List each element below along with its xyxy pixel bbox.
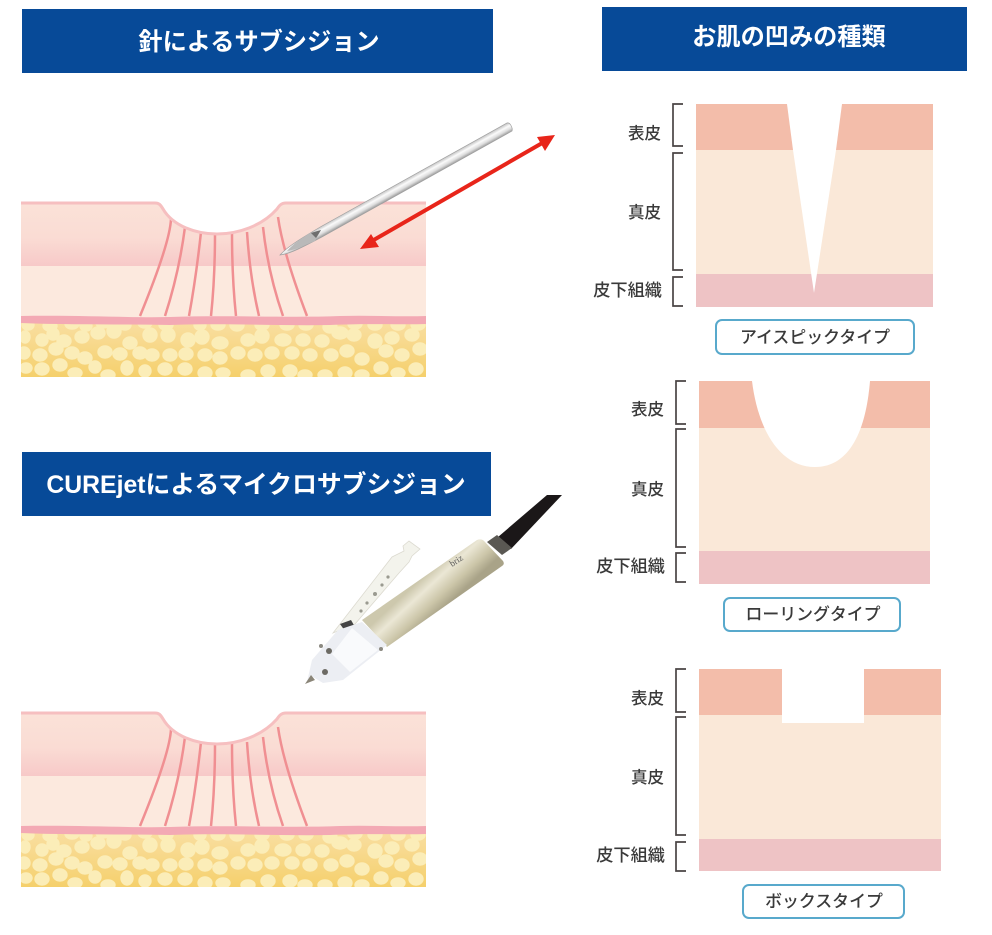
type label — [724, 598, 900, 631]
icon: CUREjet handpiece: briz — [448, 553, 465, 569]
dermis layer — [696, 150, 933, 274]
skin layer labels: 表皮 — [628, 124, 661, 143]
type label: アイスピックタイプ — [740, 328, 890, 347]
title: skin dent types — [602, 7, 967, 71]
icon: needle — [280, 123, 512, 255]
type label — [743, 885, 904, 918]
ice pick scar — [787, 104, 842, 293]
epidermis layer — [696, 104, 933, 150]
type label — [716, 320, 914, 354]
skin layer labels: 真皮 — [628, 203, 661, 222]
panel: ice pick type — [593, 104, 933, 354]
skin layer labels: 表皮 — [631, 400, 664, 419]
skin layer labels: 表皮 — [631, 689, 664, 708]
panel: box type — [596, 669, 941, 918]
subcutaneous layer — [696, 274, 933, 307]
dermis layer — [699, 428, 930, 551]
rolling scar — [752, 381, 870, 467]
icon: CUREjet handpiece — [305, 495, 562, 684]
type label: ボックスタイプ — [765, 892, 883, 911]
epidermis layer — [699, 381, 930, 428]
title: needle subcision — [22, 9, 493, 73]
skin layer labels: 皮下組織 — [596, 845, 665, 865]
title: CUREjet micro subcision: CUREjetによるマイクロサブシジョン — [46, 470, 466, 499]
subcutaneous layer — [699, 551, 930, 584]
subcutaneous layer — [699, 839, 941, 871]
dermis layer — [699, 715, 941, 839]
type label: ローリングタイプ — [745, 605, 881, 624]
skin layer labels: 皮下組織 — [596, 556, 665, 576]
skin layer labels: 真皮 — [631, 768, 664, 787]
title: needle subcision: 針によるサブシジョン — [138, 28, 380, 56]
skin diagram: needle subcision — [18, 193, 427, 380]
brackets — [676, 381, 686, 582]
skin layer labels — [596, 689, 665, 865]
skin layer labels — [596, 400, 665, 576]
panel: rolling type — [596, 381, 930, 631]
arrow: needle movement — [360, 135, 555, 249]
skin layer labels: 皮下組織 — [593, 280, 662, 300]
title: skin dent types: お肌の凹みの種類 — [692, 24, 886, 51]
brackets — [673, 104, 683, 306]
title: CUREjet micro subcision — [22, 452, 491, 516]
skin diagram: CUREjet micro subcision — [18, 703, 427, 890]
epidermis layer — [699, 669, 941, 715]
brackets — [676, 669, 686, 871]
skin layer labels: 真皮 — [631, 480, 664, 499]
box scar — [782, 669, 864, 723]
skin layer labels — [593, 124, 662, 300]
